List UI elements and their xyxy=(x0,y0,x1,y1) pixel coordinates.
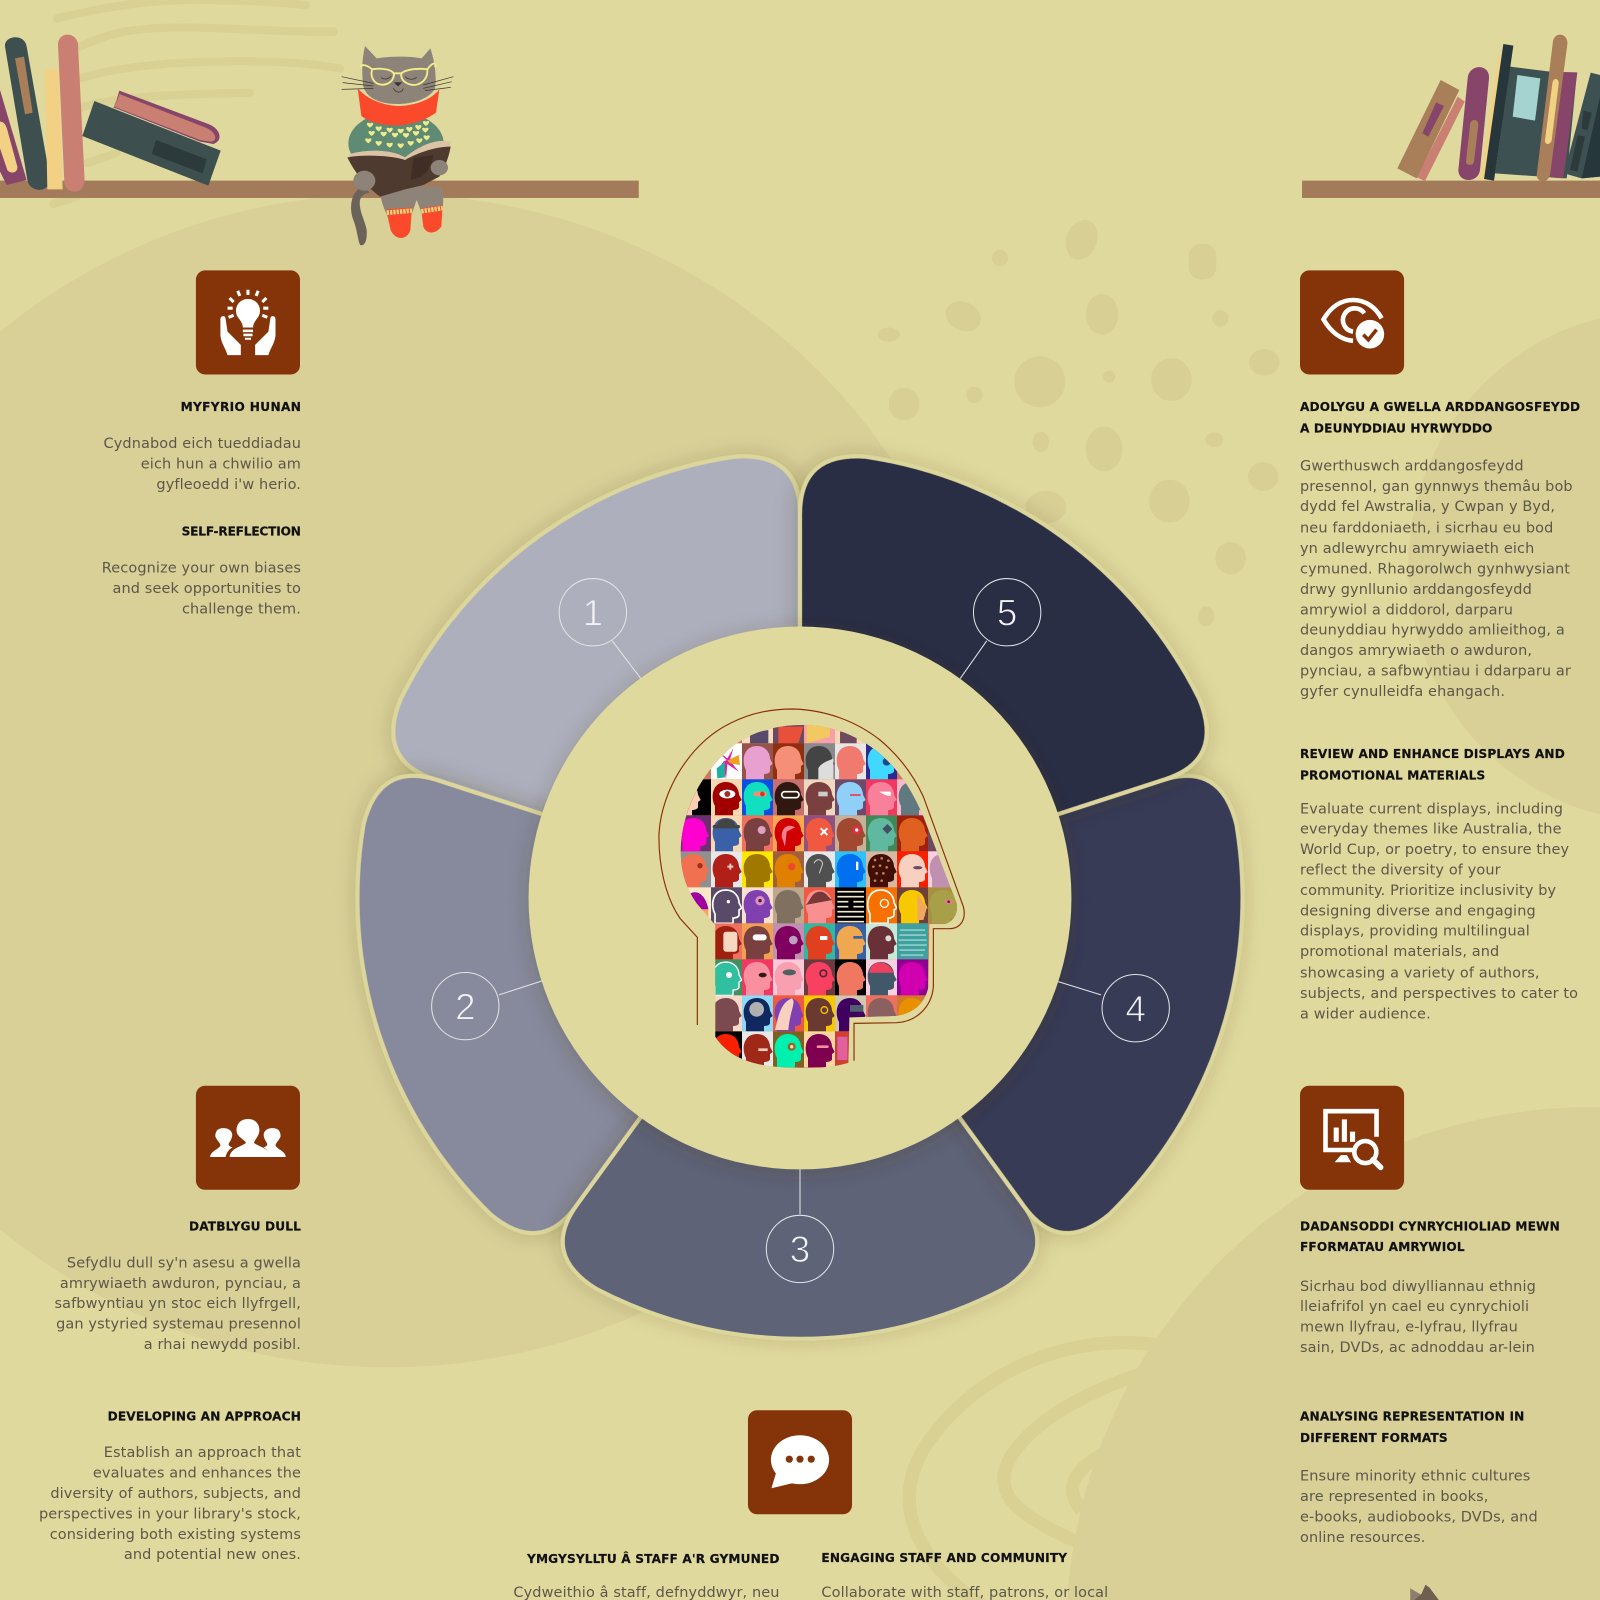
cat head xyxy=(362,46,436,104)
body: English representation: Ensure minority ethnic cultures xyxy=(1300,1469,1530,1485)
body: Welsh self-reflection: gyfleoedd i'w herio. xyxy=(156,477,301,493)
heading: Developing an approach: DEVELOPING AN APPROACH xyxy=(108,1409,301,1423)
text panel: engaging staff xyxy=(513,1551,1108,1600)
centre circle xyxy=(529,627,1071,1169)
cat ears at bottom edge xyxy=(1410,1585,1439,1600)
body: English displays: showcasing a variety of authors, xyxy=(1300,966,1540,982)
heading: Datblygu dull: DATBLYGU DULL xyxy=(189,1220,301,1234)
body: English displays: subjects, and perspectives to cater to xyxy=(1300,986,1578,1002)
body: Welsh displays: amrywiol a diddorol, darparu xyxy=(1300,602,1513,618)
books: right group xyxy=(1397,35,1600,181)
heading: Adolygu: ADOLYGU A GWELLA ARDDANGOSFEYDD xyxy=(1300,400,1580,414)
body: English displays: designing diverse and engaging xyxy=(1300,903,1536,919)
body: English approach: evaluates and enhances the xyxy=(93,1466,301,1482)
body: English displays: promotional materials, and xyxy=(1300,944,1499,960)
body: English self-reflection: and seek opportunities to xyxy=(113,581,301,597)
background blob: top right xyxy=(1408,311,1600,821)
heading: Analysing representation: ANALYSING REPRESENTATION IN xyxy=(1300,1409,1524,1423)
head mosaic tiles xyxy=(672,707,960,1071)
cat legs xyxy=(380,187,443,217)
cat sweater hearts xyxy=(365,121,430,148)
body: English approach: considering both existing systems xyxy=(50,1527,301,1543)
number 3: 3 xyxy=(790,1229,810,1270)
body: Welsh approach: a rhai newydd posibl. xyxy=(144,1337,301,1353)
body: English self-reflection: Recognize your own biases xyxy=(102,560,301,576)
body: Welsh representation: sain, DVDs, ac adnoddau ar-lein xyxy=(1300,1340,1535,1356)
body: English approach: Establish an approach that xyxy=(104,1445,301,1461)
number 4: 4 xyxy=(1126,988,1146,1029)
head outline xyxy=(659,709,964,1061)
books: left group xyxy=(0,35,221,192)
left bookshelf xyxy=(0,181,639,198)
text panel: review displays xyxy=(1300,400,1580,1022)
body: English displays: Evaluate current displays, including xyxy=(1300,801,1563,817)
connector lines and number badges xyxy=(432,579,1169,1283)
text panel: representation xyxy=(1300,1220,1560,1546)
heading: Dadansoddi: FFORMATAU AMRYWIOL xyxy=(1300,1240,1465,1254)
body: Welsh representation: mewn llyfrau, e-lyfrau, llyfrau xyxy=(1300,1320,1518,1336)
background wavy lines xyxy=(53,0,340,204)
body: English representation: are represented in books, xyxy=(1300,1489,1488,1505)
number 1: 1 xyxy=(583,593,603,634)
body: Welsh displays: yn adlewyrchu amrywiaeth eich xyxy=(1300,541,1534,557)
heading: Adolygu: A DEUNYDDIAU HYRWYDDO xyxy=(1300,422,1493,436)
icon: chart with magnifier xyxy=(1300,1086,1404,1190)
icon: speech bubble xyxy=(748,1410,852,1514)
heading: Review and enhance: PROMOTIONAL MATERIALS xyxy=(1300,769,1485,783)
body: Welsh displays: neu farddoniaeth, i sicrhau eu bod xyxy=(1300,521,1553,537)
petal 1 xyxy=(344,396,876,877)
head mosaic xyxy=(659,707,964,1071)
body: English self-reflection: challenge them. xyxy=(182,601,301,617)
cat scarf xyxy=(358,88,439,126)
body: Welsh representation: lleiafrifol yn cael eu cynrychioli xyxy=(1300,1299,1529,1315)
body: English displays: a wider audience. xyxy=(1300,1006,1431,1022)
petal 5 xyxy=(724,396,1256,877)
body: Welsh displays: cymuned. Rhagorolwch gynhwysiant xyxy=(1300,561,1570,577)
body: Welsh displays: drwy gynllunio arddangosfeydd xyxy=(1300,582,1532,598)
body: English representation: online resources. xyxy=(1300,1530,1426,1546)
body: English displays: everyday themes like Australia, the xyxy=(1300,822,1562,838)
body: Welsh displays: gyfer cynulleidfa ehangach. xyxy=(1300,684,1505,700)
body: Welsh approach: Sefydlu dull sy'n asesu a gwella xyxy=(67,1255,301,1271)
body: English displays: community. Prioritize inclusivity by xyxy=(1300,883,1557,899)
background blob: bottom right xyxy=(1066,1107,1600,1600)
body: Welsh approach: gan ystyried systemau presennol xyxy=(56,1317,301,1333)
body: English approach: and potential new ones. xyxy=(124,1547,301,1563)
text panel: self-reflection xyxy=(102,400,301,617)
icon: eye with check xyxy=(1300,270,1404,374)
cat tail xyxy=(351,187,370,245)
petal 3 xyxy=(563,1096,1037,1339)
body: English displays: reflect the diversity of your xyxy=(1300,862,1501,878)
heading: Myfyrio hunan: MYFYRIO HUNAN xyxy=(181,400,301,414)
body: Welsh displays: deunyddiau hyrwyddo amlieithog, a xyxy=(1300,623,1565,639)
cat glasses xyxy=(361,63,435,85)
icon: group of people xyxy=(196,1086,300,1190)
heading: Analysing representation: DIFFERENT FORMATS xyxy=(1300,1431,1448,1445)
icon: lightbulb in hands xyxy=(196,270,300,374)
background swirl xyxy=(909,1343,1204,1600)
body: Welsh displays: dydd fel Awstralia, y Cwpan y Byd, xyxy=(1300,499,1555,515)
heading: Self-reflection: SELF-REFLECTION xyxy=(182,525,301,539)
body: Welsh displays: dangos amrywiaeth o awduron, xyxy=(1300,643,1532,659)
panel: petal ring xyxy=(305,396,1295,1339)
heading: Ymgysylltu: YMGYSYLLTU Â STAFF A'R GYMUNED xyxy=(526,1551,780,1566)
number 5: 5 xyxy=(997,593,1017,634)
body: Welsh self-reflection: Cydnabod eich tueddiadau xyxy=(104,436,301,452)
body: Welsh approach: amrywiaeth awduron, pynciau, a xyxy=(60,1276,301,1292)
text panel: developing an approach xyxy=(39,1220,301,1563)
body: English approach: perspectives in your library's stock, xyxy=(39,1506,301,1522)
heading: Dadansoddi: DADANSODDI CYNRYCHIOLIAD MEWN xyxy=(1300,1220,1560,1234)
body: English displays: displays, providing multilingual xyxy=(1300,924,1530,940)
background speckles xyxy=(878,215,1280,627)
heading: Engaging staff: ENGAGING STAFF AND COMMUNITY xyxy=(821,1551,1067,1565)
petal 2 xyxy=(305,733,684,1261)
body: Welsh displays: presennol, gan gynnwys themâu bob xyxy=(1300,479,1573,495)
body: Welsh self-reflection: eich hun a chwilio am xyxy=(141,456,301,472)
cat paws xyxy=(353,171,375,191)
body: Welsh approach: safbwyntiau yn stoc eich llyfrgell, xyxy=(54,1296,301,1312)
cat socks xyxy=(386,205,443,238)
background blob: left xyxy=(0,194,990,1367)
right bookshelf xyxy=(1302,181,1600,198)
cat reading a book xyxy=(342,46,453,245)
petal 4 xyxy=(916,733,1295,1261)
cat sock bands xyxy=(387,208,443,213)
number 2: 2 xyxy=(455,986,476,1027)
cat book xyxy=(349,141,451,161)
heading: Review and enhance: REVIEW AND ENHANCE DISPLAYS AND xyxy=(1300,747,1565,761)
cat face xyxy=(342,76,453,92)
body: Welsh representation: Sicrhau bod diwylliannau ethnig xyxy=(1300,1279,1536,1295)
body: English displays: World Cup, or poetry, to ensure they xyxy=(1300,842,1570,858)
body: English approach: diversity of authors, subjects, and xyxy=(50,1486,301,1502)
body: Welsh displays: Gwerthuswch arddangosfeydd xyxy=(1300,458,1524,474)
body: English representation: e-books, audiobooks, DVDs, and xyxy=(1300,1509,1538,1525)
cat sweater xyxy=(348,112,444,175)
body: Welsh displays: pynciau, a safbwyntiau i ddarparu ar xyxy=(1300,664,1571,680)
